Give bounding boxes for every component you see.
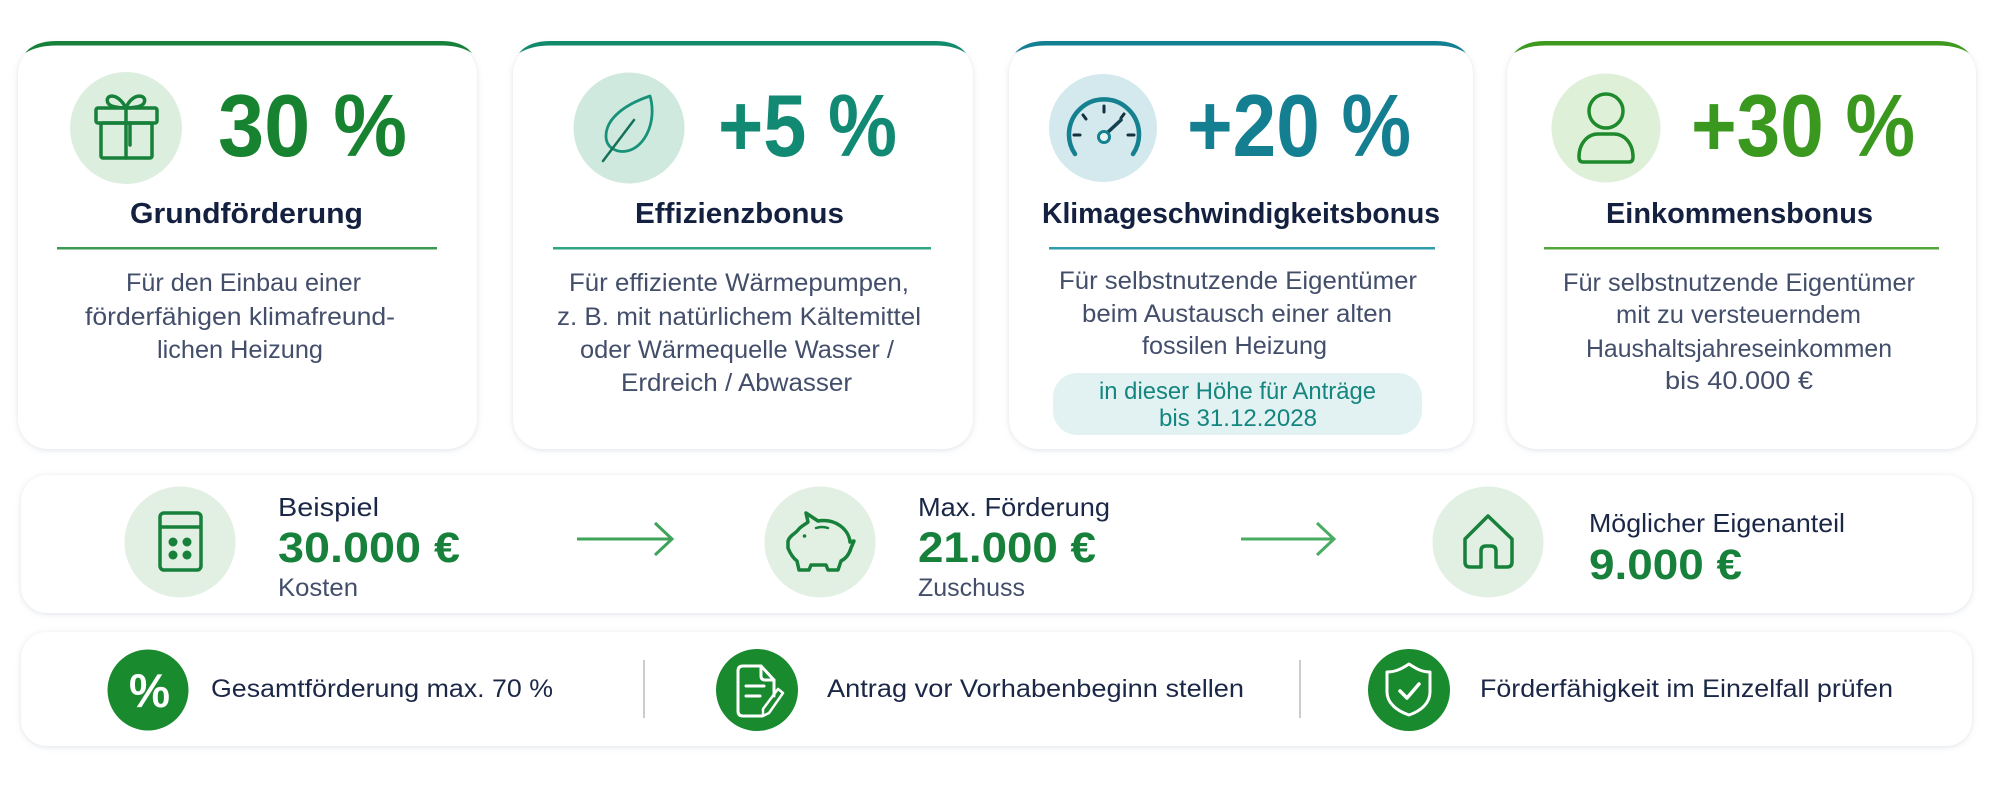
description: [1059, 267, 1417, 360]
maximum funding: 21.000 €: [918, 524, 1096, 572]
maximum funding: [918, 492, 1110, 602]
description: oder Wärmequelle Wasser /: [580, 336, 894, 364]
description: [1563, 269, 1915, 395]
row background: [21, 632, 1972, 746]
description: Haushaltsjahreseinkommen: [1586, 335, 1892, 363]
heading: Einkommensbonus: [1606, 198, 1873, 230]
card background: [1507, 44, 1976, 449]
card background: [18, 44, 477, 449]
description: beim Austausch einer alten: [1082, 300, 1392, 328]
note: application: Antrag vor Vorhabenbeginn stellen: [827, 675, 1244, 703]
arrow: [1241, 523, 1334, 555]
description: z. B. mit natürlichem Kältemittel: [557, 303, 921, 331]
arrow: [577, 523, 672, 555]
callout: deadline: [1053, 373, 1422, 435]
icon: percent: %: [129, 664, 170, 717]
row background: [21, 475, 1972, 613]
panel: Grundförderung: [18, 41, 477, 449]
description: lichen Heizung: [157, 336, 323, 364]
callout: deadline: in dieser Höhe für Anträge: [1099, 378, 1376, 405]
description: Für den Einbau einer: [126, 269, 361, 297]
own contribution: Möglicher Eigenanteil: [1589, 508, 1845, 538]
description: fossilen Heizung: [1142, 332, 1327, 360]
example cost: 30.000 €: [278, 524, 460, 572]
panel: example calculation: [21, 475, 1972, 613]
heading: Grundförderung: [130, 198, 363, 230]
heading: Klimageschwindigkeitsbonus: [1042, 198, 1440, 230]
icon: shield: [1368, 649, 1450, 731]
description: [85, 269, 395, 364]
example cost: Kosten: [278, 574, 358, 602]
description: mit zu versteuerndem: [1616, 301, 1861, 329]
description: bis 40.000 €: [1665, 367, 1813, 395]
own contribution: 9.000 €: [1589, 541, 1742, 589]
description: förderfähigen klimafreund-: [85, 303, 395, 331]
icon: leaf: [574, 72, 684, 184]
note: eligibility: Förderfähigkeit im Einzelfall prüfen: [1480, 675, 1893, 703]
maximum funding: Zuschuss: [918, 574, 1025, 602]
value: +5 %: [718, 76, 897, 175]
panel: notes: [21, 632, 1972, 746]
callout: deadline: bis 31.12.2028: [1159, 405, 1317, 432]
value: 30 %: [218, 76, 407, 175]
heading: Effizienzbonus: [635, 198, 844, 230]
description: Für selbstnutzende Eigentümer: [1563, 269, 1915, 297]
description: Für selbstnutzende Eigentümer: [1059, 267, 1417, 295]
top accent line: [1514, 41, 1969, 53]
icon: gift: [70, 72, 182, 184]
icon: person: [1552, 74, 1660, 182]
maximum funding: Max. Förderung: [918, 492, 1110, 522]
panel: Effizienzbonus: [513, 41, 973, 449]
icon: gauge: [1049, 74, 1157, 182]
value: +30 %: [1691, 76, 1915, 175]
icon: document: [716, 649, 798, 731]
example cost: [278, 492, 460, 602]
top accent line: [519, 41, 966, 53]
panel: Einkommensbonus: [1507, 41, 1976, 449]
value: +20 %: [1187, 76, 1411, 175]
icon: house: [1432, 486, 1544, 598]
note: maximum: Gesamtförderung max. 70 %: [211, 675, 553, 703]
card background: [513, 44, 973, 449]
icon: piggy bank: [764, 486, 876, 598]
icon: percent: [108, 650, 188, 730]
own contribution: [1589, 508, 1845, 589]
top accent line: [1015, 41, 1466, 53]
top accent line: [25, 41, 472, 53]
description: [557, 269, 921, 397]
icon: calculator: [124, 486, 236, 598]
description: Erdreich / Abwasser: [621, 369, 852, 397]
example cost: Beispiel: [278, 492, 379, 522]
card background: [1009, 44, 1473, 449]
description: Für effiziente Wärmepumpen,: [569, 269, 909, 297]
panel: Klimageschwindigkeitsbonus: [1009, 41, 1473, 449]
